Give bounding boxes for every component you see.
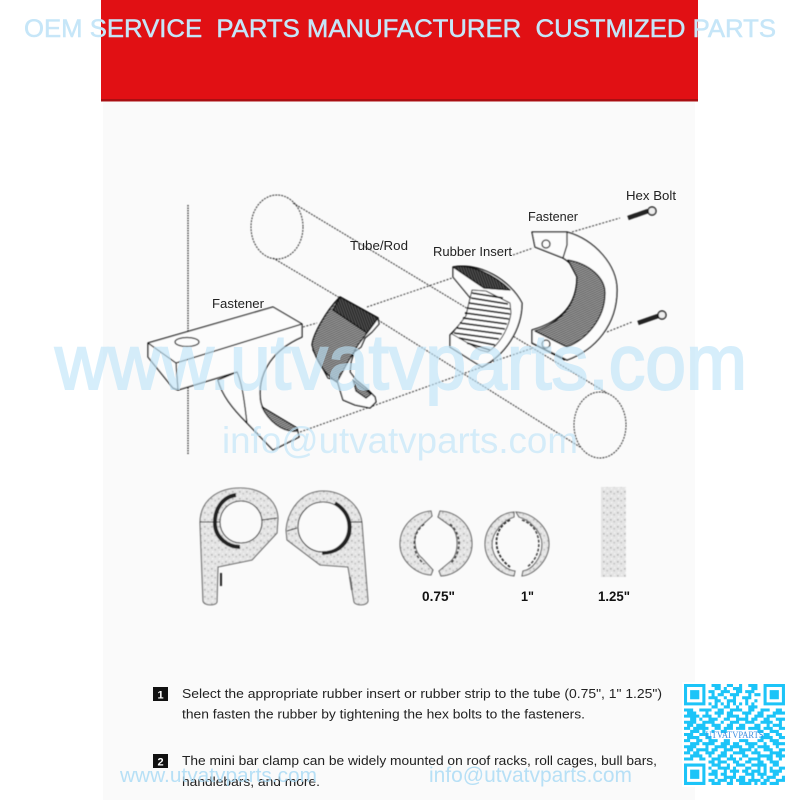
0.75 inch insert [400, 511, 472, 576]
1.25 inch rubber strip [601, 487, 626, 577]
step 1 text: then fasten the rubber by tightening the hex bolts to the fasteners. [182, 706, 585, 722]
left fastener [148, 307, 302, 450]
footer email watermark: info@utvatvparts.com [429, 764, 632, 787]
step 2 badge [153, 754, 168, 768]
step 2 badge: 2 [157, 756, 164, 768]
size labels: 1" [521, 588, 534, 604]
diagram labels: Tube/Rod [350, 239, 408, 253]
instruction step 1 [153, 686, 662, 722]
instruction step 2 [153, 753, 657, 789]
second rubber insert [450, 266, 522, 367]
header watermark text: OEM SERVICE PARTS MANUFACTURER CUSTMIZED PARTS [24, 15, 776, 43]
parts photos row [200, 487, 626, 605]
diagram labels [212, 189, 677, 311]
exploded assembly diagram [148, 195, 666, 458]
diagram labels: Rubber Insert [433, 245, 513, 259]
right clamp [286, 491, 368, 605]
footer website watermark: www.utvatvparts.com [119, 764, 317, 787]
tube outline [251, 195, 626, 458]
size labels [422, 588, 630, 604]
step 2 text: handlebars, and more. [182, 774, 320, 789]
1 inch insert [485, 512, 549, 576]
size labels: 1.25" [598, 588, 630, 604]
QR code [682, 682, 787, 787]
step 1 badge: 1 [157, 690, 164, 702]
step 1 text: Select the appropriate rubber insert or rubber strip to the tube (0.75", 1" 1.25") [182, 686, 662, 701]
first rubber insert [312, 297, 379, 408]
vertical axis line [187, 205, 189, 455]
left clamp [200, 488, 278, 605]
step 2 text [182, 753, 657, 789]
step 2 text: The mini bar clamp can be widely mounted on roof racks, roll cages, bull bars, [182, 753, 657, 768]
diagram labels: Hex Bolt [626, 189, 677, 203]
step 1 badge [153, 687, 168, 702]
size labels: 0.75" [422, 588, 455, 604]
red header banner [101, 0, 698, 102]
diagram labels: Fastener [212, 297, 264, 311]
step 1 text [182, 686, 662, 722]
diagram labels: Fastener [528, 210, 578, 224]
large website watermark: www.utvatvparts.com [54, 318, 747, 406]
QR centre label: UTVATVPARTS [706, 730, 764, 740]
page panel [103, 102, 695, 800]
right fastener [532, 232, 617, 360]
large email watermark: info@utvatvparts.com [222, 420, 578, 461]
dashed guide lines [300, 218, 632, 432]
hex bolts [628, 207, 666, 323]
